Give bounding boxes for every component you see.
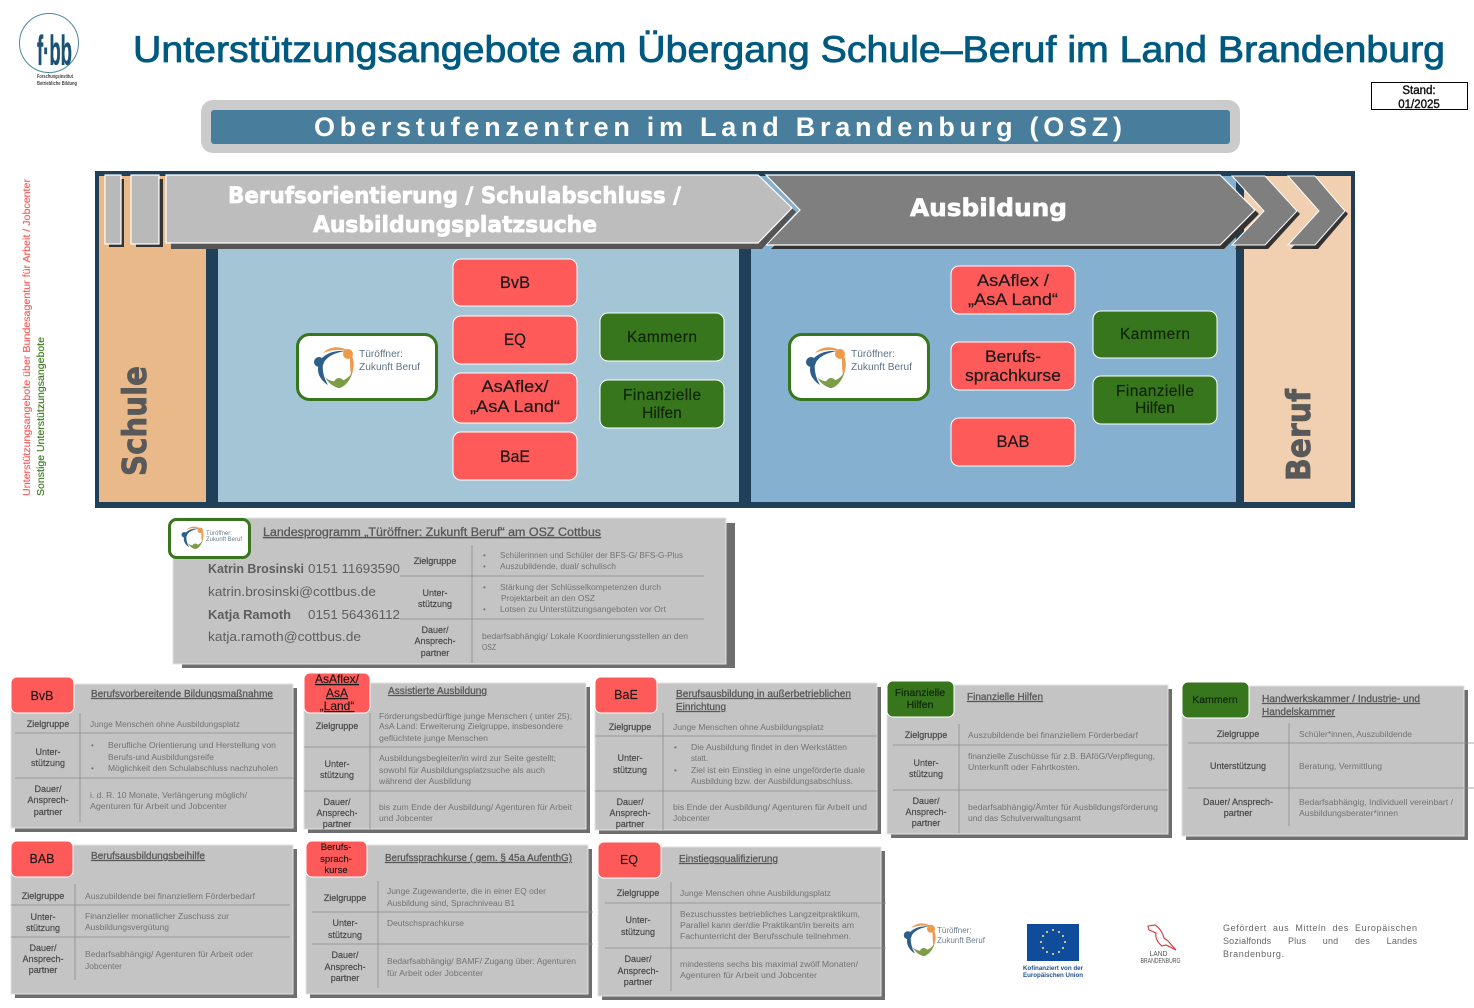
card: Berufssprachkurse: Bedarfsabhängig/ BAMF/ Zugang über: Agenturen bbox=[387, 957, 576, 966]
badge: Berufssprachkurse bbox=[306, 841, 367, 877]
card: EQ: Zielgruppe bbox=[617, 888, 659, 898]
logo: EU flag: Kofinanziert von der bbox=[1023, 966, 1084, 972]
button: AsAflex left bbox=[453, 373, 577, 423]
button: Finanzielle Hilfen right: Finanzielle bbox=[1116, 383, 1194, 400]
card: AsAflex: partner bbox=[323, 819, 351, 829]
card: BAB: Berufsausbildungsbeihilfe bbox=[91, 851, 205, 862]
card: EQ bbox=[598, 842, 886, 1000]
card: BaE: Berufsausbildung in außerbetrieblichen bbox=[676, 689, 851, 700]
card: BAB: Auszubildende bei finanziellem Förderbedarf bbox=[85, 892, 256, 901]
card: Berufssprachkurse: Unter- bbox=[332, 918, 358, 928]
card: BvB: Berufliche Orientierung und Herstellung von bbox=[108, 741, 276, 750]
card: Kammern: Schüler*innen, Auszubildende bbox=[1299, 730, 1413, 739]
card: BaE: Ziel ist ein Einstieg in eine ungeförderte duale bbox=[691, 766, 866, 775]
logo: f-bb: f·bb bbox=[37, 27, 72, 74]
badge: Berufssprachkurse: Berufs- bbox=[321, 842, 351, 853]
card: BvB bbox=[11, 677, 297, 832]
card: BvB: i. d. R. 10 Monate, Verlängerung möglich/ bbox=[90, 791, 248, 800]
button: AsAflex right: „AsA Land“ bbox=[968, 290, 1058, 309]
panel: Beruf: Beruf bbox=[1279, 388, 1318, 481]
badge: EQ: EQ bbox=[620, 853, 638, 867]
card: BvB: Agenturen für Arbeit und Jobcenter bbox=[90, 802, 227, 811]
badge: Finanzielle Hilfen: Hilfen bbox=[907, 699, 934, 711]
card: Berufssprachkurse: für Arbeit oder Jobcenter bbox=[387, 969, 483, 978]
panel: Landesprogramm: Ansprech- bbox=[414, 636, 456, 646]
card: Kammern bbox=[1182, 682, 1474, 840]
button: Finanzielle Hilfen left bbox=[600, 380, 724, 428]
button: BvB bbox=[453, 259, 577, 306]
card: BaE: Ansprech- bbox=[609, 808, 651, 818]
badge: Berufssprachkurse: kurse bbox=[324, 865, 348, 876]
panel: Schule: Schule bbox=[115, 366, 154, 476]
panel: Landesprogramm: Stärkung der Schlüsselkompetenzen durch bbox=[500, 583, 661, 592]
panel: Landesprogramm: Katja Ramoth bbox=[208, 607, 291, 622]
arrow: Berufsorientierung: Berufsorientierung / Schulabschluss / bbox=[228, 184, 682, 209]
card: AsAflex: Ansprech- bbox=[316, 808, 358, 818]
card: AsAflex: stützung bbox=[320, 770, 354, 780]
panel: Landesprogramm: Unter- bbox=[422, 588, 448, 598]
card: Kammern: Bedarfsabhängig, Individuell vereinbart / bbox=[1299, 798, 1454, 807]
logo: Türöffner footer: Türöffner: bbox=[937, 926, 972, 935]
logo: EU flag: Europäischen Union bbox=[1023, 973, 1083, 979]
card: EQ: Parallel kann der/die Praktikant/in bereits am bbox=[680, 921, 854, 930]
card: BvB: Unter- bbox=[35, 747, 61, 757]
panel: Landesprogramm: Lotsen zu Unterstützungsangeboten vor Ort bbox=[500, 605, 667, 614]
card: Finanzielle Hilfen: Finanzielle Hilfen bbox=[967, 692, 1043, 703]
card: BAB: partner bbox=[29, 965, 57, 975]
badge: BaE bbox=[595, 677, 657, 713]
box: Türöffner left bbox=[298, 334, 436, 400]
card: BaE: • bbox=[674, 766, 677, 775]
panel: Berufsorientierung background bbox=[218, 246, 739, 502]
icon: Türöffner small: Türöffner: bbox=[206, 531, 232, 537]
funding note: Brandenburg. bbox=[1223, 949, 1284, 959]
card: BaE: partner bbox=[616, 819, 644, 829]
card: BaE: bis Ende der Ausbildung/ Agenturen für Arbeit und bbox=[673, 803, 867, 812]
panel: Landesprogramm: • bbox=[483, 605, 486, 614]
arrow: small chevron 1 bbox=[1232, 176, 1300, 249]
card: Finanzielle Hilfen: und das Schulverwaltungsamt bbox=[968, 814, 1082, 823]
badge: EQ bbox=[598, 842, 661, 878]
card: BvB: Junge Menschen ohne Ausbildungsplatz bbox=[90, 720, 240, 729]
card: Berufssprachkurse: stützung bbox=[328, 930, 362, 940]
button: AsAflex left: AsAflex/ bbox=[482, 377, 549, 396]
button: BaE bbox=[453, 432, 577, 480]
card: BaE: Junge Menschen ohne Ausbildungsplatz bbox=[673, 723, 824, 732]
card: AsAflex: und Jobcenter bbox=[379, 814, 433, 823]
card: BaE: statt. bbox=[691, 754, 708, 763]
card: Finanzielle Hilfen: Ansprech- bbox=[905, 807, 947, 817]
card: EQ: Unter- bbox=[625, 915, 651, 925]
card: BaE bbox=[595, 677, 881, 834]
panel: Landesprogramm: katja.ramoth@cottbus.de bbox=[208, 629, 361, 644]
card: EQ: stützung bbox=[621, 927, 655, 937]
badge: BaE: BaE bbox=[614, 688, 638, 702]
card: Berufssprachkurse bbox=[306, 841, 593, 998]
badge: AsAflex: „Land“ bbox=[320, 699, 354, 713]
date box: 01/2025 bbox=[1398, 99, 1440, 111]
panel: Landesprogramm: Landesprogramm „Türöffner: Zukunft Beruf“ am OSZ Cottbus bbox=[263, 527, 601, 539]
button: Kammern right bbox=[1093, 311, 1217, 358]
card: BaE: Jobcenter bbox=[673, 814, 710, 823]
card: BAB: Dauer/ bbox=[29, 943, 57, 953]
card: Finanzielle Hilfen: Unter- bbox=[913, 758, 939, 768]
badge: AsAflex bbox=[304, 672, 370, 713]
button: Berufssprachkurse bbox=[951, 342, 1075, 390]
card: AsAflex: Assistierte Ausbildung bbox=[388, 686, 487, 697]
card: Finanzielle Hilfen: partner bbox=[912, 818, 940, 828]
side label: sonstige Unterstützungsangebote: Sonstige Unterstützungsangebote bbox=[36, 337, 47, 496]
button: BaE: BaE bbox=[500, 447, 530, 466]
card: Berufssprachkurse: partner bbox=[331, 973, 359, 983]
card: AsAflex: Zielgruppe bbox=[316, 721, 358, 731]
card: Berufssprachkurse: Ansprech- bbox=[324, 962, 366, 972]
box: Türöffner right bbox=[790, 334, 928, 400]
card: BvB: stützung bbox=[31, 758, 65, 768]
logo: Land Brandenburg: BRANDENBURG bbox=[1140, 956, 1181, 965]
box: Türöffner left: Zukunft Beruf bbox=[359, 362, 420, 373]
card: AsAflex: Förderungsbedürftige junge Menschen ( unter 25); bbox=[379, 712, 572, 721]
card: BAB: Finanzieller monatlicher Zuschuss zur bbox=[85, 912, 229, 921]
arrow: Ausbildung: Ausbildung bbox=[910, 194, 1067, 222]
card: Berufssprachkurse: Zielgruppe bbox=[324, 893, 366, 903]
button: Kammern right: Kammern bbox=[1120, 326, 1190, 343]
card: BvB: Möglichkeit den Schulabschluss nachzuholen bbox=[108, 764, 278, 773]
card: Finanzielle Hilfen: Zielgruppe bbox=[905, 730, 947, 740]
card: Kammern: partner bbox=[1224, 808, 1252, 818]
card: BvB: • bbox=[91, 741, 94, 750]
main diagram frame bbox=[95, 171, 1355, 508]
card: Finanzielle Hilfen bbox=[887, 681, 1172, 838]
button: Finanzielle Hilfen left: Finanzielle bbox=[623, 387, 701, 404]
button: Finanzielle Hilfen left: Hilfen bbox=[642, 405, 682, 422]
box: Türöffner right: Zukunft Beruf bbox=[851, 362, 912, 373]
date box: Stand: bbox=[1402, 85, 1436, 97]
card: Berufssprachkurse: Ausbildung sind, Sprachniveau B1 bbox=[387, 899, 516, 908]
logo: EU flag bbox=[1023, 924, 1084, 979]
card: AsAflex: bis zum Ende der Ausbildung/ Agenturen für Arbeit bbox=[379, 803, 573, 812]
card: EQ: Bezuschusstes betriebliches Langzeitpraktikum, bbox=[680, 910, 860, 919]
banner: Oberstufenzentren bbox=[201, 100, 1240, 153]
card: Kammern: Beratung, Vermittlung bbox=[1299, 762, 1382, 771]
panel: Landesprogramm: bedarfsabhängig/ Lokale Koordinierungsstellen an den bbox=[482, 632, 688, 641]
stripes: grey bars bbox=[105, 175, 163, 247]
card: BaE: stützung bbox=[613, 765, 647, 775]
badge: Kammern bbox=[1182, 682, 1249, 718]
card: Berufssprachkurse: Junge Zugewanderte, die in einer EQ oder bbox=[387, 887, 546, 896]
panel: Landesprogramm: 0151 56436112 bbox=[308, 607, 400, 622]
card: BvB: Zielgruppe bbox=[27, 719, 69, 729]
panel: Landesprogramm bbox=[170, 518, 735, 668]
funding note bbox=[1223, 923, 1418, 959]
logo: f-bb: Forschungsinstitut bbox=[37, 74, 73, 80]
panel: Ausbildung background bbox=[751, 176, 1236, 502]
arrow: Ausbildung bbox=[766, 175, 1259, 249]
card: Kammern: Zielgruppe bbox=[1217, 729, 1259, 739]
card: EQ: Fachunterricht der Berufsschule teilnehmen. bbox=[680, 932, 851, 941]
logo: Türöffner footer: Zukunft Beruf bbox=[937, 936, 986, 945]
card: BvB: Dauer/ bbox=[34, 784, 62, 794]
panel: Landesprogramm: stützung bbox=[418, 599, 452, 609]
card: AsAflex: Unter- bbox=[324, 759, 350, 769]
panel: Landesprogramm: OSZ bbox=[482, 643, 496, 652]
button: EQ: EQ bbox=[504, 330, 526, 349]
funding note: Gefördert aus Mitteln des Europäischen bbox=[1223, 923, 1417, 933]
card: Kammern: Ausbildungsberater*innen bbox=[1299, 809, 1398, 818]
panel: Landesprogramm: • bbox=[483, 583, 486, 592]
card: EQ: Dauer/ bbox=[624, 954, 652, 964]
badge: BvB bbox=[11, 677, 74, 713]
date box bbox=[1372, 82, 1468, 111]
arrow: small chevron 2 bbox=[1288, 176, 1348, 249]
panel: Landesprogramm: Projektarbeit an den OSZ bbox=[501, 594, 595, 603]
badge: BAB bbox=[11, 841, 73, 877]
card: Finanzielle Hilfen: bedarfsabhängig/Ämter für Ausbildungsförderung bbox=[968, 803, 1158, 812]
panel: Landesprogramm: katrin.brosinski@cottbus.de bbox=[208, 584, 376, 599]
card: BAB: Unter- bbox=[30, 912, 56, 922]
panel: Landesprogramm: • bbox=[483, 562, 486, 571]
button: Finanzielle Hilfen right: Hilfen bbox=[1135, 400, 1175, 417]
card: AsAflex: AsA Land: Erweiterung Zielgruppe, insbesondere bbox=[379, 722, 564, 731]
icon: Türöffner small bbox=[170, 520, 250, 558]
title: Unterstützungsangebote am Übergang Schule–Beruf im Land Brandenburg bbox=[133, 28, 1445, 70]
panel: Landesprogramm: 0151 11693590 bbox=[308, 561, 400, 576]
card: Finanzielle Hilfen: stützung bbox=[909, 769, 943, 779]
arrow: Berufsorientierung: Ausbildungsplatzsuche bbox=[313, 213, 597, 238]
card: EQ: Ansprech- bbox=[617, 966, 659, 976]
button: BvB: BvB bbox=[500, 273, 530, 292]
panel: Landesprogramm: Katrin Brosinski bbox=[208, 561, 304, 576]
panel: Landesprogramm: Auszubildende, dual/ schulisch bbox=[500, 562, 616, 571]
card: Finanzielle Hilfen: Unterkunft oder Fahrtkosten. bbox=[968, 763, 1080, 772]
card: Berufssprachkurse: Berufssprachkurse ( gem. § 45a AufenthG) bbox=[385, 853, 572, 864]
funding note: Sozialfonds Plus und des Landes bbox=[1223, 936, 1418, 946]
button: Berufssprachkurse: sprachkurse bbox=[965, 366, 1061, 385]
button: Berufssprachkurse: Berufs- bbox=[985, 347, 1041, 366]
card: Kammern: Handwerkskammer / Industrie- und bbox=[1262, 694, 1420, 705]
card: EQ: Agenturen für Arbeit und Jobcenter bbox=[680, 971, 817, 980]
card: BvB: Berufsvorbereitende Bildungsmaßnahme bbox=[91, 689, 273, 700]
card: BAB: Bedarfsabhängig/ Agenturen für Arbeit oder bbox=[85, 950, 253, 959]
card: BaE: • bbox=[674, 743, 677, 752]
logo: Türöffner footer bbox=[904, 923, 986, 956]
card: EQ: Junge Menschen ohne Ausbildungsplatz bbox=[680, 889, 831, 898]
logo: Land Brandenburg bbox=[1140, 925, 1181, 965]
button: AsAflex left: „AsA Land“ bbox=[470, 397, 560, 416]
card: EQ: partner bbox=[624, 977, 652, 987]
panel: Landesprogramm: • bbox=[483, 551, 486, 560]
card: Finanzielle Hilfen: finanzielle Zuschüsse für z.B. BAföG/Verpflegung, bbox=[968, 752, 1155, 761]
card: BAB: Zielgruppe bbox=[22, 891, 64, 901]
button: Finanzielle Hilfen right bbox=[1093, 376, 1217, 424]
logo: f-bb bbox=[20, 14, 78, 87]
button: AsAflex right bbox=[951, 266, 1075, 314]
card: BaE: Zielgruppe bbox=[609, 722, 651, 732]
panel: Landesprogramm: partner bbox=[421, 648, 449, 658]
badge: Berufssprachkurse: sprach- bbox=[320, 854, 352, 865]
card: Berufssprachkurse: Deutschsprachkurse bbox=[387, 919, 465, 928]
button: BAB: BAB bbox=[996, 432, 1030, 451]
panel: Schule bbox=[99, 176, 206, 502]
button: EQ bbox=[453, 316, 577, 364]
card: BvB: partner bbox=[34, 807, 62, 817]
card: BvB: Berufs-und Ausbildungsreife bbox=[108, 753, 215, 762]
icon: Türöffner small: Zukunft Beruf bbox=[206, 537, 242, 543]
card: AsAflex: sowohl für Ausbildungsplatzsuche als auch bbox=[379, 766, 545, 775]
box: Türöffner left: Türöffner: bbox=[359, 349, 403, 360]
button: Kammern left bbox=[600, 313, 724, 361]
logo: f-bb: Betriebliche Bildung bbox=[37, 81, 77, 87]
button: Kammern left: Kammern bbox=[627, 329, 697, 346]
badge: Finanzielle Hilfen bbox=[887, 681, 954, 717]
card: AsAflex: während der Ausbildung bbox=[378, 777, 471, 786]
card: AsAflex: geflüchtete junge Menschen bbox=[379, 734, 488, 743]
card: Berufssprachkurse: Dauer/ bbox=[331, 950, 359, 960]
card: BaE: Einrichtung bbox=[676, 702, 726, 713]
card: Kammern: Handelskammer bbox=[1262, 707, 1336, 718]
card: Kammern: Dauer/ Ansprech- bbox=[1203, 797, 1273, 807]
badge: Finanzielle Hilfen: Finanzielle bbox=[895, 687, 945, 699]
card: Finanzielle Hilfen: Dauer/ bbox=[912, 796, 940, 806]
logo: Land Brandenburg: LAND bbox=[1150, 949, 1168, 958]
card: BvB: Ansprech- bbox=[27, 795, 69, 805]
card: BvB: • bbox=[91, 764, 94, 773]
card: BAB: Ausbildungsvergütung bbox=[85, 923, 169, 932]
card: BAB bbox=[11, 841, 297, 998]
card: EQ: Einstiegsqualifizierung bbox=[679, 854, 778, 865]
card: AsAflex bbox=[304, 672, 590, 833]
card: BaE: Ausbildung bzw. der Ausbildungsabschluss. bbox=[691, 777, 853, 786]
badge: AsAflex: AsAflex/ bbox=[315, 672, 360, 686]
badge: BAB: BAB bbox=[29, 852, 55, 866]
side label: Unterstützungsangebot Bundesagentur: Unterstützungsangebote über Bundesagentur für Arbeit / Jobcenter bbox=[22, 178, 33, 496]
button: AsAflex right: AsAflex / bbox=[977, 271, 1049, 290]
box: Türöffner right: Türöffner: bbox=[851, 349, 895, 360]
banner: Oberstufenzentren: Oberstufenzentren im Land Brandenburg (OSZ) bbox=[314, 112, 1122, 142]
panel: Landesprogramm: Dauer/ bbox=[421, 625, 449, 635]
arrow: Berufsorientierung bbox=[166, 175, 796, 249]
card: BAB: Jobcenter bbox=[85, 962, 122, 971]
card: AsAflex: Ausbildungsbegleiter/in wird zur Seite gestellt; bbox=[379, 754, 556, 763]
card: BAB: stützung bbox=[26, 923, 60, 933]
button: BAB bbox=[951, 418, 1075, 466]
card: BaE: Die Ausbildung findet in den Werkstätten bbox=[691, 743, 847, 752]
badge: Kammern: Kammern bbox=[1192, 694, 1238, 706]
panel: Beruf bbox=[1244, 176, 1351, 502]
panel: Landesprogramm: Zielgruppe bbox=[414, 556, 456, 566]
card: BAB: Ansprech- bbox=[22, 954, 64, 964]
badge: AsAflex: AsA bbox=[326, 686, 348, 700]
card: BaE: Dauer/ bbox=[616, 797, 644, 807]
card: EQ: mindestens sechs bis maximal zwölf Monaten/ bbox=[680, 960, 859, 969]
card: BaE: Unter- bbox=[617, 753, 643, 763]
card: AsAflex: Dauer/ bbox=[323, 797, 351, 807]
panel: Landesprogramm: Schülerinnen und Schüler der BFS-G/ BFS-G-Plus bbox=[500, 551, 683, 560]
card: Kammern: Unterstützung bbox=[1210, 761, 1266, 771]
card: Finanzielle Hilfen: Auszubildende bei finanziellem Förderbedarf bbox=[968, 731, 1139, 740]
badge: BvB: BvB bbox=[31, 689, 53, 703]
